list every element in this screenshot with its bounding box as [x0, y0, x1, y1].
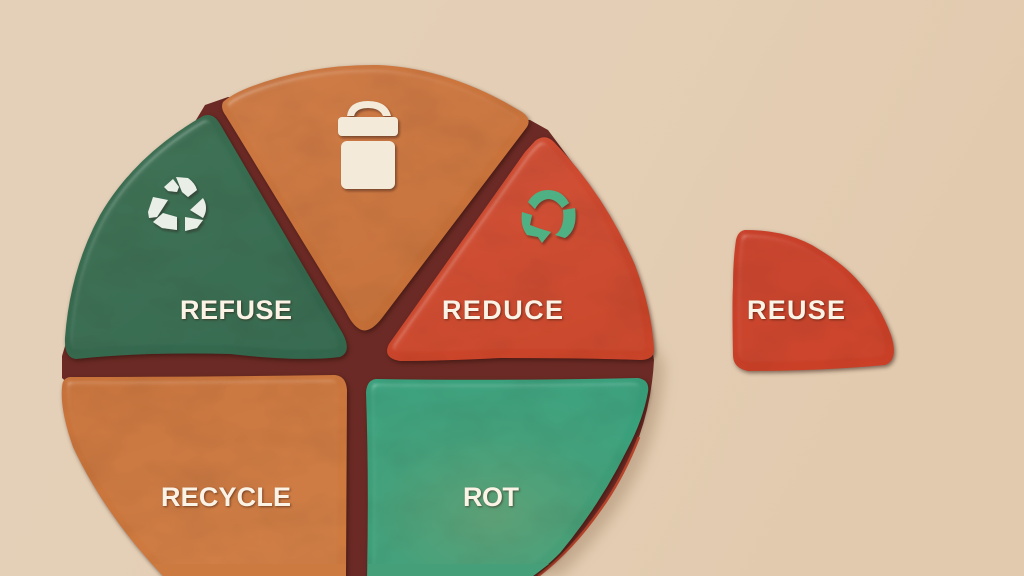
- panel: REFUSE wedge: [65, 115, 347, 359]
- label: REFUSE: REFUSE: [180, 295, 292, 325]
- disc shadow: [180, 110, 664, 576]
- icon: white recycle symbol: [148, 177, 206, 231]
- panel: RECYCLE wedge: [62, 375, 347, 576]
- pie base disc: [62, 97, 654, 576]
- panel: detached REUSE wedge: [732, 230, 894, 371]
- base rim: red edge beside ROT: [538, 437, 639, 576]
- label: REUSE: REUSE: [747, 295, 845, 325]
- panel: top orange wedge with trash icon: [222, 65, 529, 330]
- label: ROT: ROT: [463, 482, 520, 512]
- label: REDUCE: REDUCE: [442, 295, 563, 325]
- panel: REDUCE wedge: [387, 137, 654, 361]
- label: RECYCLE: RECYCLE: [161, 482, 291, 512]
- bottom edge patch: rot: [368, 564, 549, 576]
- panel: ROT wedge: [366, 378, 648, 576]
- icon: trash bin: [338, 101, 398, 189]
- bottom edge patch: recycle: [152, 564, 346, 576]
- icon: green recycle arrows: [522, 190, 576, 243]
